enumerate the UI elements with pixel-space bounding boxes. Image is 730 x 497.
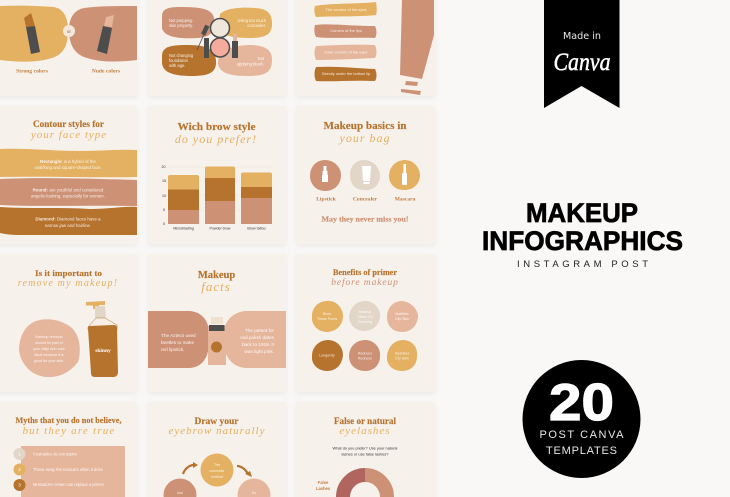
makeup tips text: Using too much	[238, 18, 267, 23]
blob: blurs those pores	[312, 301, 343, 332]
myth list text	[33, 452, 105, 487]
label: mascara: Mascara	[395, 196, 416, 202]
band text: angelic-looking, especially for women.	[31, 194, 105, 198]
band: diamond	[0, 207, 137, 235]
donut chart	[343, 475, 387, 497]
question text: What do you prefer? Use your natural	[333, 446, 398, 450]
makeup tips text: Not prepping	[169, 18, 193, 23]
makeup tips text: concealer.	[247, 23, 266, 28]
panel: makeup basics	[296, 106, 435, 244]
badge number: 20	[549, 374, 614, 432]
pill: under the bottom lip	[314, 67, 376, 81]
blob labels: Longevity	[319, 354, 335, 358]
blob labels: Glides On	[357, 315, 373, 319]
nude color blob	[69, 6, 137, 62]
stacked bar chart: 10	[162, 194, 166, 198]
gold color blob	[0, 6, 68, 62]
panel: benefits of primer	[296, 254, 435, 392]
circle: concealer method: method	[211, 475, 223, 479]
icon: concealer tube	[400, 0, 434, 95]
blob labels: Mattifies	[395, 312, 409, 316]
label: lipstick: Lipstick	[316, 196, 337, 202]
heading: remove makeup: Is it important to	[35, 268, 103, 278]
stacked bar chart: Brow tattoo	[247, 226, 266, 230]
script: do you prefer: do you prefer!	[175, 132, 257, 146]
heading: makeup basics: Makeup basics in	[324, 121, 407, 132]
blob with removal tip: ritual because it is	[34, 353, 64, 357]
label: nude colors: Nude colors	[92, 68, 121, 74]
heading: false or natural: False or natural	[334, 417, 396, 427]
blob labels: Makeup	[359, 310, 371, 314]
fact panel: nail polish	[225, 311, 286, 368]
fact text: nail polish dates	[240, 335, 275, 340]
panel: contour styles	[0, 106, 137, 244]
blob: reduces redness	[349, 340, 380, 371]
subtitle: INSTAGRAM POST	[517, 259, 648, 270]
blob with removal tip: your daily skin care	[33, 347, 65, 351]
ribbon: made in canva	[544, 0, 620, 108]
fact text: back to 1919. It	[242, 342, 275, 347]
blob: mattifies oily skin	[387, 301, 418, 332]
blob labels: Oily Skin	[395, 317, 409, 321]
panel: draw eyebrow	[148, 402, 286, 497]
fact text	[161, 328, 275, 354]
myth list text: Moisturizer cream can replace a primer	[33, 482, 105, 487]
band: rectangle	[0, 149, 137, 177]
blob: not prepping skin	[162, 7, 214, 38]
label: false lashes	[316, 480, 331, 491]
fact text: The Aztecs used	[161, 333, 196, 338]
script: eyebrow naturally: eyebrow naturally	[169, 425, 265, 437]
blob: longevity	[312, 340, 343, 371]
blob: not applying blush	[218, 45, 272, 76]
blob with removal tip: Makeup removal	[35, 335, 63, 339]
icon: nail polish bottle	[208, 317, 226, 365]
blob with removal tip: should be part of	[35, 341, 64, 345]
panel: where to apply concealer	[296, 0, 435, 96]
heading: draw your: Draw your	[194, 417, 239, 427]
script: eyelashes: eyelashes	[339, 425, 391, 437]
blob labels: Those Pores	[317, 317, 337, 321]
band: round	[0, 178, 137, 206]
arrow: left to centre	[183, 462, 198, 474]
badge line: templates: TEMPLATES	[546, 445, 617, 457]
fact text: was light pink.	[245, 349, 274, 354]
panel: false or natural eyelashes	[296, 402, 435, 497]
numbered badge 2: 2	[18, 467, 21, 472]
band text: oval/long and square-shaped face.	[34, 165, 102, 170]
blob labels: Smoothly	[358, 320, 373, 324]
label: concealer: Concealer	[353, 196, 378, 202]
blob labels	[317, 310, 409, 360]
panel: myths	[0, 402, 137, 497]
blob labels: Reduces	[358, 352, 372, 356]
stacked bar chart: 5	[163, 208, 165, 212]
closing line: May they never miss you!	[322, 216, 408, 224]
label: false lashes: False	[318, 480, 329, 485]
circle: use: Use	[177, 491, 183, 495]
numbered badge 3	[14, 479, 26, 491]
blob with removal tip	[19, 319, 80, 377]
pill: inner corners	[314, 45, 376, 60]
label: strong colors: Strong colors	[16, 68, 49, 74]
makeup tips text: applying blush.	[237, 62, 264, 66]
makeup tips text: Not	[258, 56, 265, 61]
main title	[482, 198, 683, 270]
myth list text: Throw away the mascara when it dries	[33, 467, 103, 472]
icon: strong lipstick	[24, 13, 40, 54]
icon: lipstick	[310, 160, 341, 191]
panel: strong or nude colors	[0, 0, 137, 96]
blob labels: Redness	[358, 356, 372, 360]
blob with removal tip: good for your skin.	[34, 359, 64, 363]
panel: remove makeup	[0, 254, 137, 392]
icon: pump bottle	[86, 301, 118, 377]
script: but they are true: but they are true	[22, 425, 116, 437]
arrow: centre to right	[237, 466, 252, 477]
makeup tips text: with age.	[169, 63, 185, 68]
icon: mascara	[389, 160, 420, 190]
or badge	[63, 25, 75, 37]
script: facts: facts	[201, 279, 231, 294]
badge line: post canva: POST CANVA	[540, 429, 624, 441]
pill: corners of the lips	[314, 24, 376, 38]
script: before makeup: before makeup	[331, 277, 399, 288]
fact text: beetles to make	[161, 340, 194, 345]
or badge: or	[67, 30, 71, 35]
numbered badge 1: 1	[18, 452, 21, 456]
numbered badge 2	[14, 464, 26, 476]
panel: makeup facts	[148, 254, 286, 392]
icon: compact with brush and lipsticks	[197, 18, 238, 58]
stacked bar chart: Microblading	[173, 226, 194, 230]
ribbon text: canva: Canva	[554, 49, 610, 76]
label: false lashes: Lashes	[316, 486, 331, 491]
blob labels: Hydrates	[395, 352, 409, 356]
blob labels: Blurs	[323, 312, 331, 316]
band text: Round: are youthful and considered	[33, 188, 104, 192]
title line: infographics: INFOGRAPHICS	[482, 226, 683, 256]
heading: brow style: Wich brow style	[178, 122, 256, 133]
script: your bag: your bag	[338, 131, 390, 145]
stacked bar chart: 20	[162, 165, 166, 169]
pill text: The corners of the eyes	[326, 7, 366, 12]
band text: Diamond: Diamond faces have a	[35, 216, 101, 222]
icon: concealer	[350, 160, 380, 190]
heading: myths: Myths that you do not believe,	[16, 415, 122, 425]
list background	[21, 446, 125, 497]
circle: concealer method: concealer	[209, 469, 225, 473]
blob: too much concealer	[219, 8, 272, 38]
heading: contour styles: Contour styles for	[33, 120, 105, 130]
heading: makeup: Makeup	[198, 270, 235, 281]
makeup tips text	[169, 18, 267, 68]
panel: brow style chart	[148, 106, 286, 244]
blob: hydrates dry skin	[387, 340, 417, 371]
stacked bar chart: 0	[163, 222, 165, 226]
myth list text: Cosmetics do not expire	[33, 452, 78, 456]
question text: lashes or use false lashes?	[342, 452, 389, 456]
badge: 20 post canva templates	[522, 360, 640, 478]
band text: narrow jaw and hairline.	[45, 223, 91, 228]
fact text: The patent for	[245, 328, 274, 333]
pill text: Inner corners of the eyes	[324, 50, 368, 54]
makeup tips text: foundation	[169, 58, 189, 63]
stacked bar chart: 15	[162, 179, 166, 183]
blob: makeup stays	[349, 301, 380, 331]
title line: makeup: MAKEUP	[526, 198, 638, 228]
icon: nude lipstick	[97, 15, 114, 54]
blob: not changing foundation	[162, 45, 216, 76]
stacked bar chart	[162, 165, 272, 230]
pill text	[322, 7, 370, 76]
pill: corners of the eyes	[314, 2, 377, 17]
fact text: red lipstick.	[161, 347, 184, 352]
band text: Rectangle: is a hybrid of the	[40, 159, 97, 164]
blob labels: Dry Skin	[395, 356, 409, 360]
stacked bar chart: Powder brow	[210, 226, 231, 230]
makeup tips text: Not changing	[169, 53, 194, 58]
pill text: Directly under the bottom lip	[322, 71, 370, 76]
numbered badge 1	[14, 448, 26, 460]
circle: do: Do	[252, 491, 256, 495]
makeup tips text: skin properly.	[169, 23, 193, 28]
fact panel: aztecs	[148, 311, 208, 368]
question text	[333, 446, 398, 456]
icon: pump bottle: skinny	[95, 348, 111, 354]
heading: benefits of primer: Benefits of primer	[333, 267, 397, 277]
circle: concealer method	[200, 454, 234, 486]
template card grid	[0, 0, 435, 497]
script: your face type: your face type	[30, 129, 107, 141]
circle: concealer method: The	[214, 463, 220, 467]
pill text: Corners of the lips	[330, 28, 362, 33]
band text	[31, 159, 105, 228]
ribbon text: made in: Made in	[563, 31, 601, 42]
script: remove my makeup: remove my makeup!	[18, 278, 118, 289]
panel: makeup mistakes	[148, 0, 286, 96]
numbered badge 3: 3	[18, 482, 21, 488]
